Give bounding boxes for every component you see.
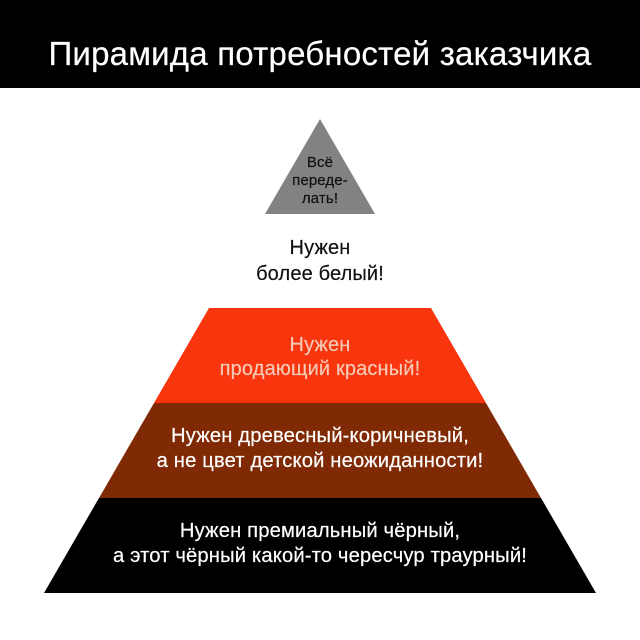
black tier text: Нужен премиальный чёрный,	[180, 520, 460, 542]
red tier text: продающий красный!	[220, 358, 420, 380]
red tier text: Нужен	[290, 334, 350, 356]
header bar	[0, 0, 640, 88]
brown tier text: Нужен древесный-коричневый,	[171, 425, 469, 447]
top tier text: Всё	[307, 154, 333, 171]
white tier text: Нужен	[290, 237, 350, 259]
top tier text: переде-	[292, 172, 348, 189]
white tier text: более белый!	[256, 262, 384, 284]
brown tier text	[157, 425, 483, 472]
tier: black	[44, 498, 596, 593]
tier: brown	[99, 403, 541, 498]
title: Пирамида потребностей заказчика	[48, 35, 592, 72]
white tier text	[256, 237, 384, 284]
top tier: grey triangle	[265, 119, 375, 214]
black tier text	[113, 520, 527, 567]
black tier text: а этот чёрный какой-то чересчур траурный!	[113, 545, 527, 567]
red tier text	[220, 334, 420, 380]
top tier text: лать!	[302, 190, 338, 207]
tier: red	[154, 308, 486, 403]
brown tier text: а не цвет детской неожиданности!	[157, 450, 483, 472]
top tier text	[292, 154, 348, 207]
